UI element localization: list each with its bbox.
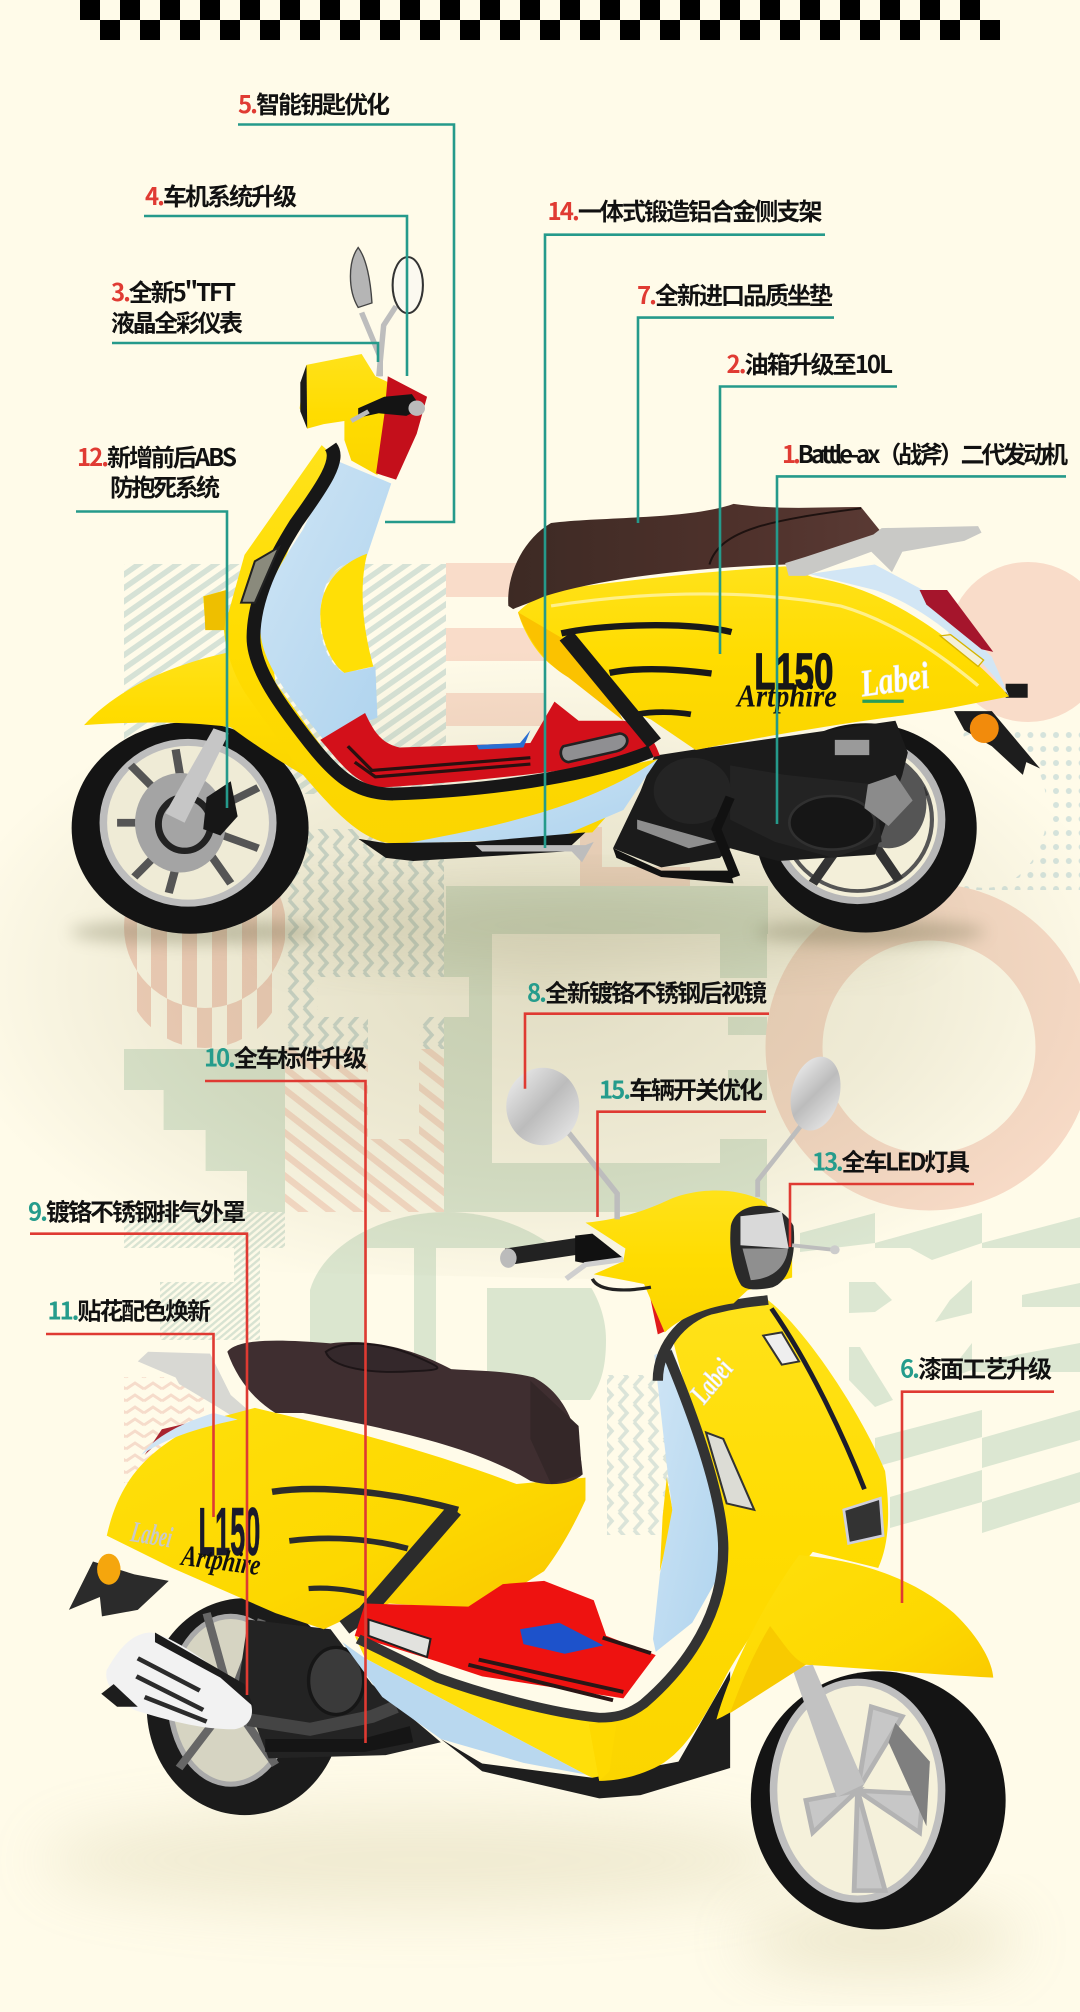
callout 7: seat bbox=[637, 276, 834, 523]
bottom scooter: three-quarter view bbox=[69, 1052, 1006, 1929]
tricolor badge bbox=[763, 1332, 799, 1365]
brand badge: Labei bbox=[857, 654, 932, 705]
rear body bbox=[518, 566, 1009, 750]
front fork bbox=[792, 1665, 864, 1797]
grip bbox=[506, 1245, 584, 1257]
floor ribs bbox=[348, 746, 530, 777]
engine bbox=[238, 1620, 441, 1758]
mirror right bbox=[758, 1052, 847, 1197]
front wheel bbox=[72, 722, 309, 934]
rear mudguard bbox=[69, 1561, 169, 1616]
label: 6.漆面工艺升级 bbox=[900, 1350, 1052, 1384]
scooter front shield and floor bbox=[203, 445, 658, 843]
callout 1: engine bbox=[777, 435, 1068, 824]
label: 1.Battle-ax（战斧）二代发动机 bbox=[782, 435, 1068, 470]
underbody bbox=[358, 832, 585, 861]
front fender bbox=[84, 651, 303, 775]
yellow inset bbox=[320, 554, 373, 673]
label line 2: 液晶全彩仪表 bbox=[111, 304, 243, 338]
rear mudguard and reflector bbox=[954, 684, 1040, 775]
callout 11: decals bbox=[46, 1292, 214, 1517]
seat quilt patch bbox=[326, 1344, 437, 1372]
tail light bbox=[145, 1423, 189, 1455]
left lever bbox=[566, 1259, 623, 1279]
blue tail edge bbox=[141, 1413, 238, 1455]
callout 15: switches bbox=[598, 1070, 766, 1217]
underbody bbox=[441, 1671, 730, 1798]
label: 14.一体式锻造铝合金侧支架 bbox=[548, 192, 822, 227]
side vents bbox=[272, 1489, 458, 1627]
model badge: L150: L150 bbox=[754, 644, 833, 700]
checkered top border bbox=[80, 0, 1000, 40]
label line 2: 防抱死系统 bbox=[110, 468, 220, 503]
red neck bbox=[646, 1278, 667, 1334]
callout 12: ABS bbox=[76, 438, 237, 808]
floor plate bbox=[369, 1620, 431, 1657]
yellow strip beside blue bbox=[660, 1478, 674, 1571]
top scooter: side view bbox=[72, 247, 1040, 934]
label: 8.全新镀铬不锈钢后视镜 bbox=[527, 974, 767, 1008]
inner blue shield bbox=[653, 1349, 727, 1652]
rear marker bbox=[940, 635, 984, 667]
engine and swing arm bbox=[613, 721, 913, 883]
callout 3: TFT display bbox=[111, 273, 378, 362]
rear body shading bbox=[518, 612, 623, 721]
lever tip bbox=[830, 1245, 840, 1254]
rear blue fairing bbox=[809, 564, 1009, 696]
black trim bbox=[358, 1300, 768, 1718]
label line 1: 3.全新5''TFT bbox=[111, 273, 236, 308]
callout 2: fuel tank bbox=[720, 345, 897, 654]
background pattern blocks bbox=[124, 562, 1080, 1535]
front floor edge bbox=[589, 1723, 616, 1781]
brand badge: Labei bbox=[128, 1515, 175, 1554]
rear rack bbox=[785, 526, 982, 576]
seat bbox=[508, 504, 882, 609]
front wheel bbox=[751, 1665, 1006, 1929]
lower blue panel bbox=[342, 1642, 585, 1774]
glove vent grille bbox=[844, 1498, 883, 1543]
callout 10: badges bbox=[204, 1038, 367, 1743]
front fender bbox=[716, 1555, 993, 1720]
label: 11.贴花配色焕新 bbox=[48, 1292, 211, 1326]
rear reflector bbox=[97, 1554, 121, 1585]
shadow under top scooter bbox=[38, 704, 1034, 1256]
blue floor mat bbox=[520, 1623, 603, 1654]
side LED bbox=[706, 1432, 754, 1510]
label: 15.车辆开关优化 bbox=[599, 1070, 763, 1106]
lever bbox=[351, 411, 369, 421]
footpeg bbox=[475, 842, 594, 862]
rear body bbox=[107, 1408, 585, 1629]
rear wheel bbox=[147, 1598, 342, 1815]
side vents bbox=[561, 625, 732, 743]
label: 5.智能钥匙优化 bbox=[238, 85, 390, 120]
front shield bbox=[589, 1300, 888, 1781]
grip end bbox=[500, 1248, 517, 1268]
exhaust pipe bbox=[248, 1707, 396, 1729]
shadow under bottom scooter bbox=[40, 1810, 1020, 1970]
callout 9: exhaust cover bbox=[28, 1192, 247, 1695]
label line 1: 12.新增前后ABS bbox=[77, 438, 237, 473]
top grip bbox=[358, 394, 422, 418]
callout 8: mirrors bbox=[525, 974, 769, 1089]
red floor bbox=[355, 1581, 656, 1698]
red head cover bbox=[376, 376, 427, 480]
flag stripe bbox=[862, 700, 904, 703]
brand script: Labei bbox=[683, 1353, 741, 1410]
kickstand bar bbox=[265, 1726, 413, 1752]
rear body highlight bbox=[551, 594, 978, 686]
label: 10.全车标件升级 bbox=[204, 1038, 367, 1074]
callout 13: LED lamps bbox=[790, 1142, 974, 1247]
seat seam bbox=[709, 508, 861, 564]
lower yellow panel bbox=[355, 1636, 616, 1781]
model badge: script: Artphire bbox=[735, 679, 837, 714]
chrome exhaust shield bbox=[101, 1632, 253, 1729]
mirror right bbox=[379, 257, 423, 376]
fender overlap bbox=[730, 1626, 806, 1713]
mirror left bbox=[350, 247, 380, 376]
black trim bbox=[253, 446, 651, 794]
label: 9.镀铬不锈钢排气外罩 bbox=[28, 1192, 246, 1228]
bar end bbox=[408, 401, 425, 416]
label: 7.全新进口品质坐垫 bbox=[637, 276, 833, 311]
rear wheel bbox=[755, 723, 977, 932]
side indicator bbox=[241, 547, 279, 603]
floor ribs bbox=[468, 1638, 651, 1700]
front fork bbox=[165, 728, 229, 823]
seat quilt front bbox=[530, 1381, 582, 1484]
label: 13.全车LED灯具 bbox=[812, 1142, 970, 1178]
label: 4.车机系统升级 bbox=[145, 177, 297, 212]
switch block bbox=[575, 1234, 623, 1265]
callout 5: smart key bbox=[238, 85, 454, 522]
red floor bbox=[320, 702, 660, 788]
callout 4: head unit bbox=[144, 177, 407, 376]
fender cap bbox=[204, 590, 227, 630]
headlamp bbox=[730, 1206, 794, 1289]
label: 2.油箱升级至10L bbox=[726, 345, 893, 380]
dark stripe bbox=[771, 1309, 864, 1489]
callout 14: side stand bbox=[545, 192, 825, 848]
headset bbox=[585, 1190, 792, 1332]
right lever bbox=[792, 1245, 833, 1250]
rear rack bbox=[138, 1352, 251, 1420]
seat bbox=[227, 1341, 583, 1484]
cable bbox=[592, 1279, 651, 1290]
tail light bbox=[920, 590, 993, 652]
inner blue shield bbox=[260, 460, 391, 740]
floor plate bbox=[561, 733, 627, 762]
lower blue panel bbox=[406, 759, 658, 843]
callout 6: paint bbox=[900, 1350, 1054, 1603]
headlight edge bbox=[300, 365, 307, 429]
mirror left bbox=[506, 1068, 617, 1219]
fan cover bbox=[309, 1647, 364, 1714]
blue floor mat bbox=[477, 730, 530, 749]
headset bbox=[300, 354, 389, 475]
bottom scooter: three-quarter view: L150 bbox=[198, 1494, 260, 1570]
model badge: script: Artphire bbox=[178, 1539, 263, 1582]
